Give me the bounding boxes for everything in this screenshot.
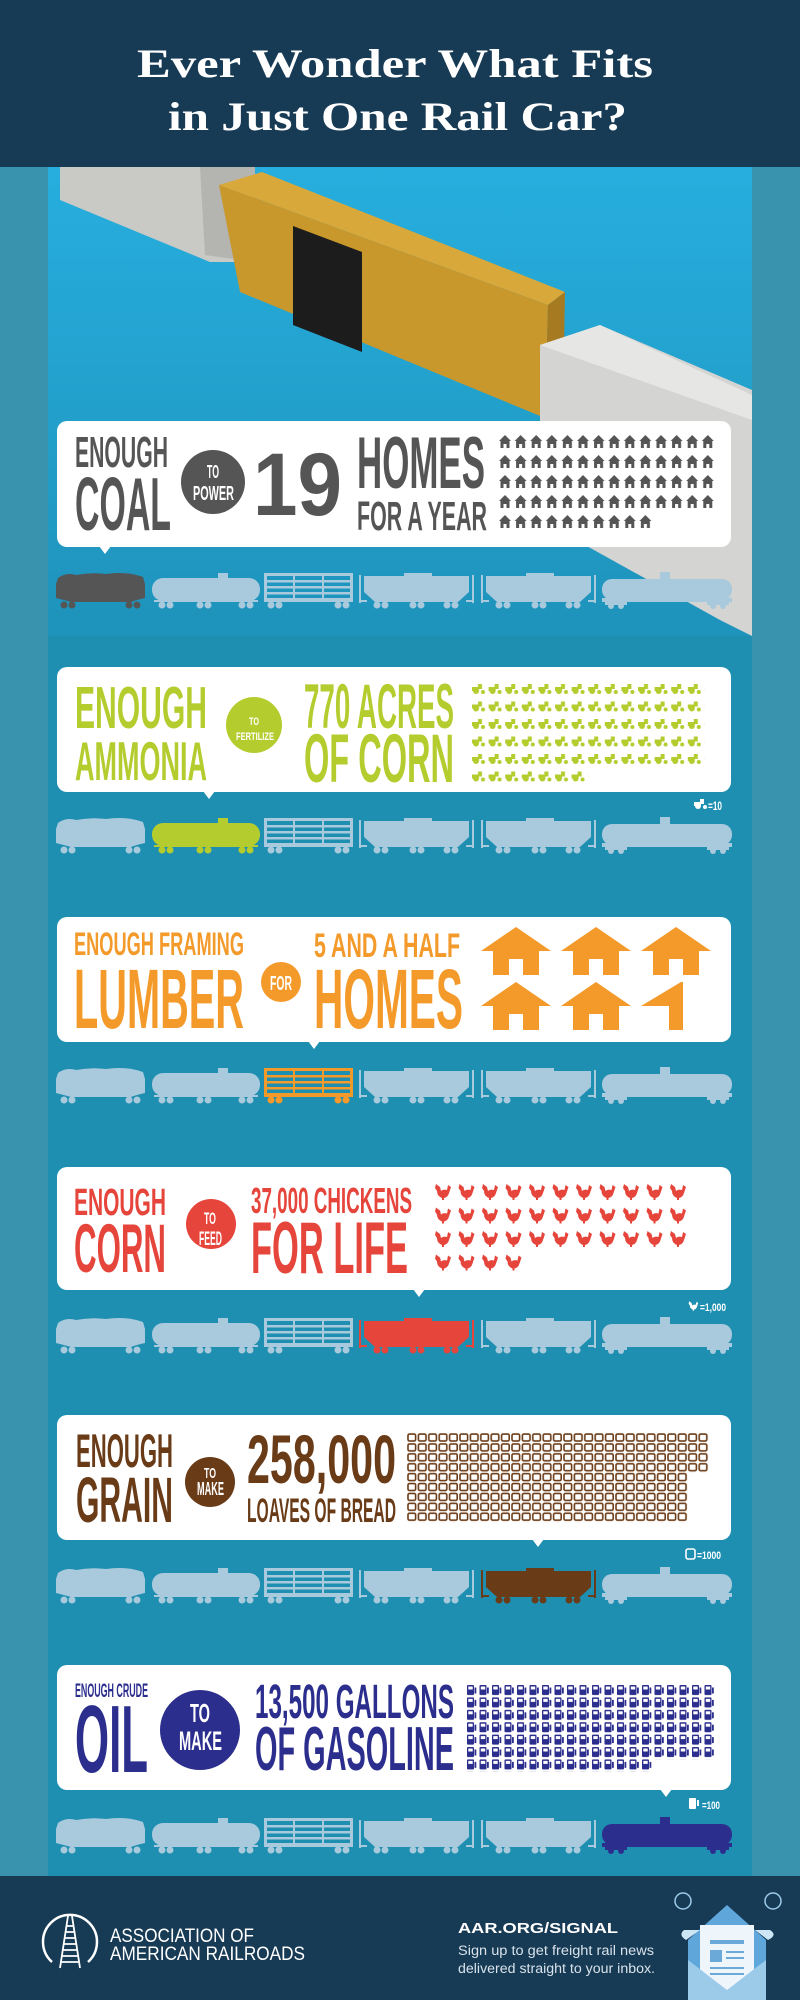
legend: tractor = 10	[694, 799, 722, 813]
legend: chicken = 1,000	[689, 1301, 726, 1314]
panel: crude oil: TO	[190, 1698, 210, 1728]
train row 6	[56, 1817, 732, 1854]
panel: grain: LOAVES OF BREAD	[247, 1492, 396, 1530]
panel: ammonia: OF CORN	[304, 720, 454, 797]
icon grid: tractors	[472, 683, 704, 788]
logo: AAR: ASSOCIATION OF	[110, 1926, 254, 1947]
panel: grain: TO	[204, 1465, 216, 1482]
signup text: delivered straight to your inbox.	[458, 1961, 655, 1976]
panel: coal: COAL	[75, 462, 171, 546]
panel: grain: ENOUGH	[76, 1424, 173, 1477]
panel: coal: HOMES	[357, 423, 485, 504]
panel: grain	[57, 1415, 731, 1547]
icon: newsletter envelope	[675, 1893, 781, 2000]
train row 3	[56, 1067, 732, 1104]
signup text	[458, 1920, 655, 1976]
panel: crude oil: OIL	[75, 1686, 148, 1793]
panel: coal: 19	[253, 434, 342, 534]
icon grid: chickens	[434, 1182, 692, 1276]
footer	[0, 1876, 800, 2000]
panel: ammonia: 770 ACRES	[304, 672, 454, 742]
title: Ever Wonder What Fits	[137, 41, 653, 86]
panel: lumber: 5 AND A HALF	[314, 927, 460, 965]
panel: corn: TO	[204, 1209, 216, 1228]
train row 1	[56, 572, 732, 609]
panel: coal: POWER	[193, 483, 234, 505]
signup text: AAR.ORG/SIGNAL	[458, 1920, 618, 1937]
panel: crude oil: OF GASOLINE	[255, 1715, 454, 1784]
photo: boxcars	[60, 167, 752, 636]
title: in Just One Rail Car?	[168, 94, 627, 139]
panel: crude oil: 13,500 GALLONS	[255, 1676, 454, 1729]
panel: corn: CORN	[74, 1210, 166, 1287]
panel: coal: TO	[207, 462, 219, 482]
panel: ammonia: AMMONIA	[75, 730, 207, 792]
panel: crude oil: MAKE	[179, 1726, 222, 1756]
icon grid: gas pumps	[467, 1685, 717, 1772]
legend: tractor = 10: =10	[708, 799, 722, 813]
legend: pump = 100: =100	[702, 1800, 720, 1812]
train row 4	[56, 1317, 732, 1354]
panel: corn	[57, 1167, 731, 1297]
panel: grain: MAKE	[197, 1479, 224, 1499]
panel: coal	[57, 421, 731, 554]
panel: crude oil: ENOUGH CRUDE	[75, 1681, 148, 1702]
panel: corn: 37,000 CHICKENS	[251, 1180, 412, 1221]
panel: grain: GRAIN	[76, 1464, 173, 1536]
panel: corn: ENOUGH	[74, 1182, 166, 1224]
icons: 5.5 houses	[481, 927, 711, 1030]
panel: grain: 258,000	[247, 1421, 396, 1498]
panel: corn: FOR LIFE	[251, 1208, 408, 1289]
panel: ammonia: ENOUGH	[75, 675, 207, 741]
panel: ammonia: FERTILIZE	[236, 731, 274, 743]
panel: ammonia	[57, 667, 731, 799]
panel: crude oil	[57, 1665, 731, 1797]
panel: coal: ENOUGH	[75, 428, 168, 477]
panel: lumber: ENOUGH FRAMING	[74, 926, 244, 962]
panel: lumber: FOR	[270, 973, 292, 995]
panel: coal: FOR A YEAR	[357, 493, 487, 539]
panel: lumber: HOMES	[314, 952, 463, 1046]
logo: AAR	[43, 1915, 305, 1968]
logo: AAR: AMERICAN RAILROADS	[110, 1944, 305, 1965]
legend: pump = 100	[689, 1798, 720, 1812]
legend: loaf = 1000	[686, 1549, 721, 1562]
panel: lumber	[57, 917, 731, 1049]
title	[137, 41, 653, 139]
panel: ammonia: TO	[249, 716, 259, 728]
train row 5	[56, 1567, 732, 1604]
signup text: Sign up to get freight rail news	[458, 1943, 654, 1958]
panel: lumber: LUMBER	[74, 952, 244, 1046]
header	[0, 0, 800, 167]
legend: chicken = 1,000: =1,000	[700, 1302, 726, 1314]
legend: loaf = 1000: =1000	[697, 1550, 721, 1562]
panel: corn: FEED	[199, 1229, 222, 1250]
icon grid: homes	[499, 435, 717, 535]
icon grid: loaves	[407, 1433, 709, 1522]
train row 2	[56, 817, 732, 854]
